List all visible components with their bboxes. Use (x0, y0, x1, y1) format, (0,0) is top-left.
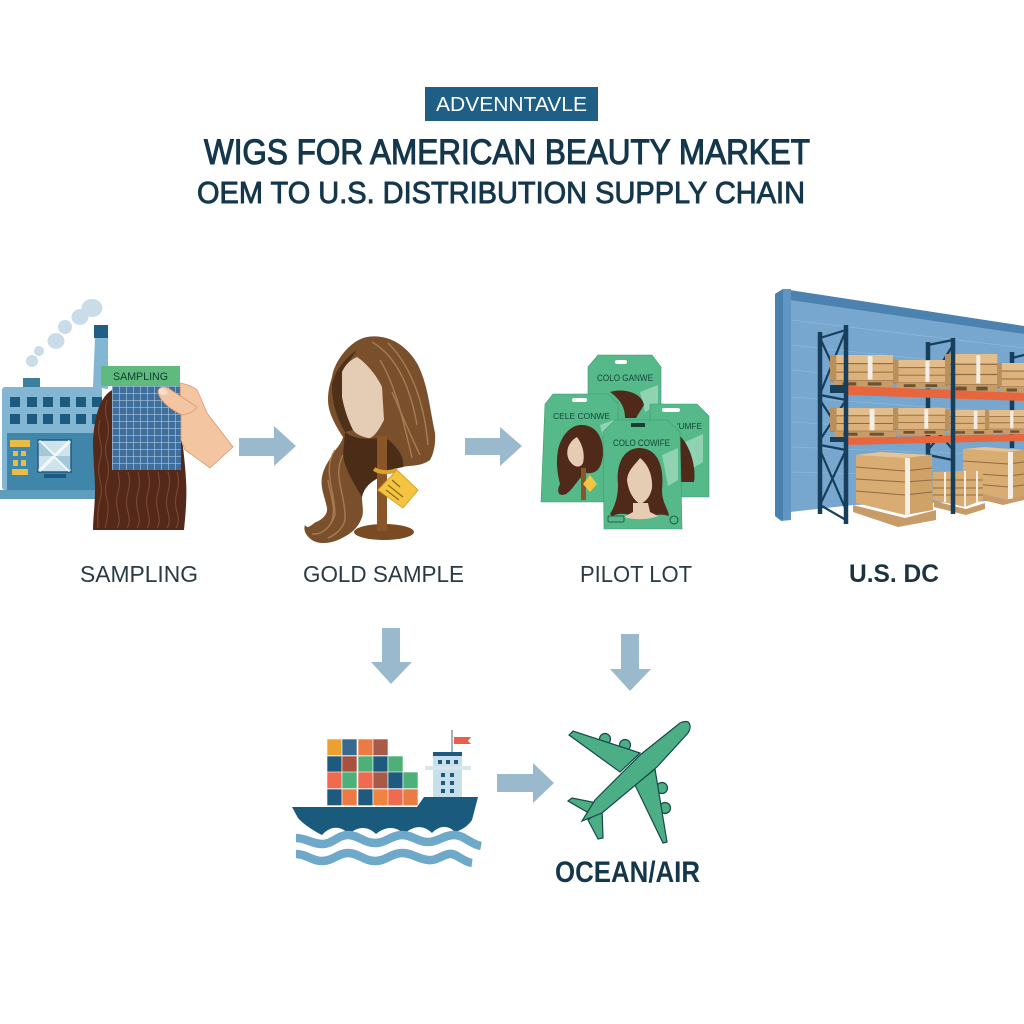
title line 1: WIGS FOR AMERICAN BEAUTY MARKET (204, 133, 810, 172)
icon: U.S. distribution center warehouse (775, 289, 1024, 527)
floor pallet left (853, 452, 936, 527)
icon: wig on stand with gold tag (304, 336, 435, 543)
box front: COLO COWIFE (613, 438, 670, 448)
box right: 'UMFE (677, 422, 702, 431)
wig hair (304, 336, 435, 543)
badge: ADVENNTAVLE (425, 87, 598, 121)
containers (327, 739, 418, 806)
hull (292, 797, 478, 835)
icon: airplane (568, 722, 690, 843)
arrow: sampling to gold sample (239, 426, 296, 466)
arrow: ship to plane (497, 763, 554, 803)
hair weft (93, 390, 186, 530)
title line 2: OEM TO U.S. DISTRIBUTION SUPPLY CHAIN (197, 175, 805, 210)
floor pallet middle (933, 470, 985, 515)
icon: factory with hair sampling (0, 299, 233, 530)
icon: container ship (292, 730, 481, 863)
green label: SAMPLING: SAMPLING (113, 371, 168, 383)
arrow: gold sample down to ship (371, 628, 412, 684)
middle shelf beam (830, 434, 1024, 445)
middle shelf crates (830, 408, 1024, 437)
label: OCEAN/AIR: OCEAN/AIR (555, 856, 700, 889)
box back (588, 355, 661, 420)
green label: SAMPLING (101, 366, 180, 386)
bridge tower (425, 730, 471, 798)
box left (541, 394, 618, 502)
mesh swatch (112, 386, 181, 470)
label: GOLD SAMPLE: GOLD SAMPLE (303, 561, 464, 587)
factory smoke (26, 299, 102, 367)
box front (603, 420, 682, 529)
waves (296, 835, 481, 863)
hand (158, 383, 233, 468)
label: PILOT LOT: PILOT LOT (580, 561, 692, 587)
floor pallet right (963, 447, 1024, 505)
label: SAMPLING: SAMPLING (80, 561, 198, 587)
factory building (0, 325, 108, 499)
top shelf beam (830, 385, 1024, 401)
box back: COLO GANWE (597, 373, 653, 383)
box right (650, 404, 709, 497)
stand (354, 436, 414, 540)
gold tag (374, 469, 418, 508)
box left: CELE CONWE (553, 411, 610, 421)
mannequin face (342, 357, 384, 438)
rear rack posts (820, 330, 1024, 520)
top shelf crates (830, 354, 1024, 393)
arrow: pilot lot down to plane (610, 634, 651, 691)
arrow: gold sample to pilot lot (465, 427, 522, 466)
front rack posts (846, 325, 953, 524)
label: U.S. DC: U.S. DC (849, 560, 939, 588)
badge: ADVENNTAVLE: ADVENNTAVLE (436, 94, 587, 116)
icon: pilot lot wig boxes (541, 355, 709, 529)
warehouse wall (775, 289, 1024, 521)
